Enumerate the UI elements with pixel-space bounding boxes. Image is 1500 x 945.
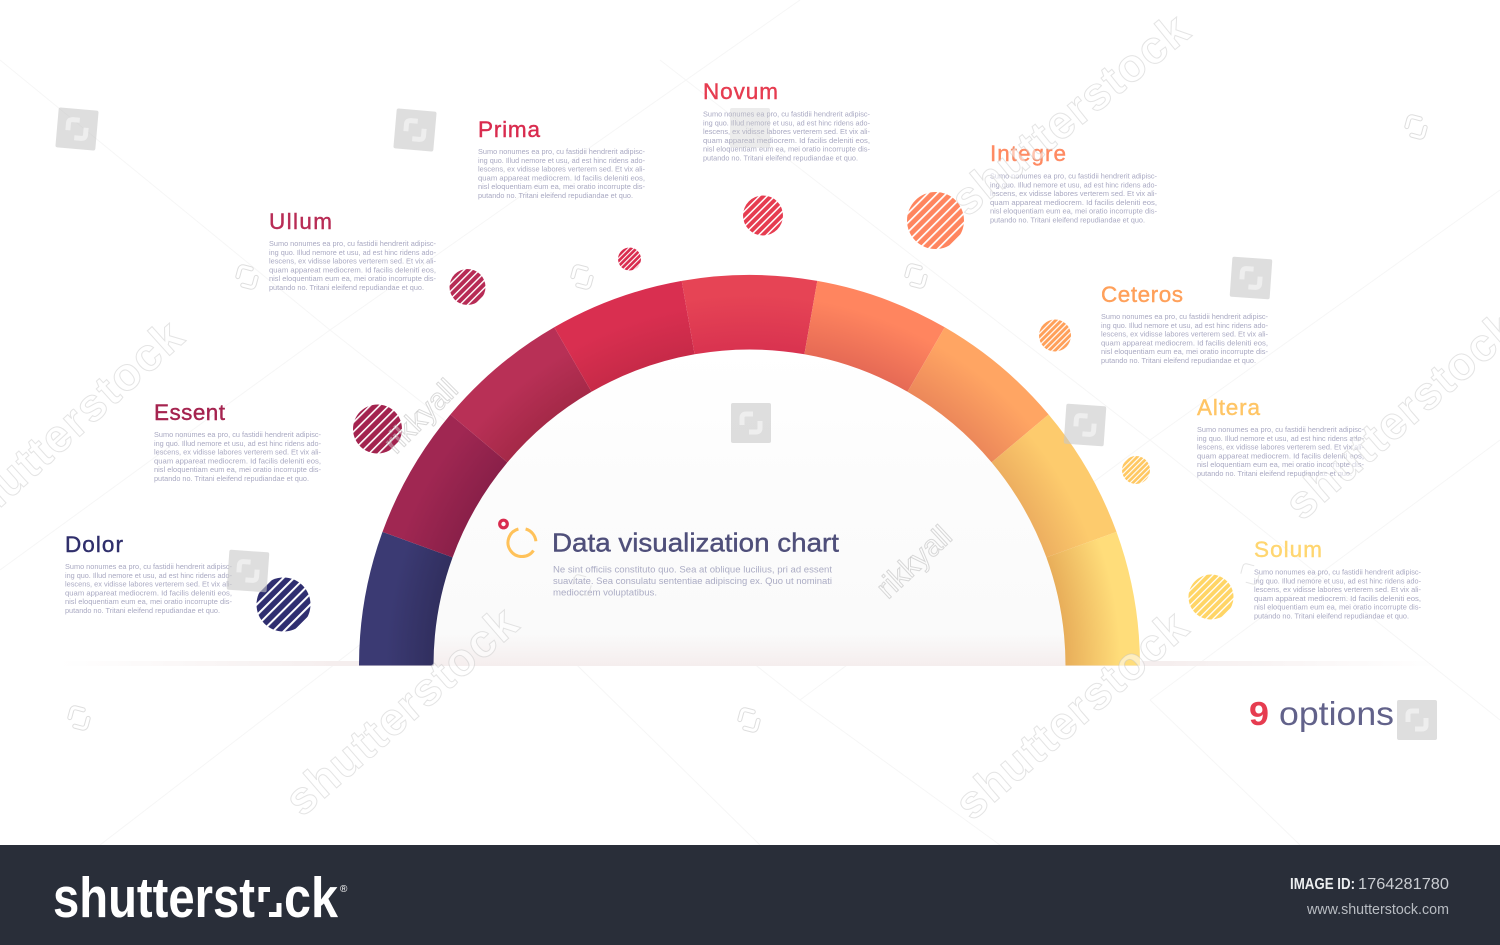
label block: Solum (1254, 537, 1422, 620)
chart description: suavitate. Sea consulatu sententiae adipiscing ex. Quo ut nominati (553, 576, 832, 586)
body text: Dolor: lescens, ex vidisse labores verterem sed. Et vix ali- (65, 580, 233, 589)
body text: Integre: nisl eloquentiam eum ea, mei oratio incorrupte dis- (990, 207, 1158, 216)
segment: Novum (682, 275, 817, 354)
body text: Essent: nisl eloquentiam eum ea, mei oratio incorrupte dis- (154, 465, 322, 474)
footer logo: shutterst (53, 866, 255, 930)
marker: Ceteros (1039, 320, 1071, 352)
body text: Ullum: Sumo nonumes ea pro, cu fastidii hendrerit adipisc- (269, 239, 437, 248)
body text: Ceteros (1101, 312, 1269, 365)
marker: Novum (743, 196, 783, 236)
marker: Integre (907, 192, 964, 249)
segment: Integre (804, 281, 945, 392)
body text: Essent: putando no. Tritani eleifend repudiandae et quo. (154, 474, 309, 483)
body text: Dolor: quam appareat mediocrem. Id facilis deleniti eos, (65, 588, 232, 597)
label block: Dolor (65, 532, 233, 615)
body text: Ullum: quam appareat mediocrem. Id facilis deleniti eos, (269, 265, 436, 274)
chart description (553, 564, 833, 598)
body text: Altera: lescens, ex vidisse labores verterem sed. Et vix ali- (1197, 443, 1365, 452)
watermark layer: rikkyall (870, 520, 959, 605)
body text: Ceteros: lescens, ex vidisse labores verterem sed. Et vix ali- (1101, 330, 1269, 339)
footer bar (0, 845, 1500, 945)
segment: Essent (382, 414, 507, 557)
heading: Dolor: Dolor (65, 532, 124, 557)
body text: Integre: ing quo. Illud nemore et usu, ad est hinc ridens ado- (990, 180, 1158, 189)
image id: 1764281780 (1358, 876, 1449, 893)
body text: Solum: putando no. Tritani eleifend repudiandae et quo. (1254, 612, 1409, 620)
body text: Ullum (269, 239, 437, 292)
label block: Integre (990, 141, 1158, 224)
heading: Ullum: Ullum (269, 209, 332, 234)
label block: Prima (478, 117, 646, 200)
body text: Altera: Sumo nonumes ea pro, cu fastidii hendrerit adipisc- (1197, 425, 1365, 434)
options count: options (1279, 695, 1394, 732)
body text: Essent: Sumo nonumes ea pro, cu fastidii hendrerit adipisc- (154, 430, 322, 439)
marker: Ullum (450, 269, 486, 305)
chart description: mediocrem voluptatibus. (553, 588, 657, 598)
body text: Novum: putando no. Tritani eleifend repudiandae et quo. (703, 154, 858, 162)
body text: Dolor: Sumo nonumes ea pro, cu fastidii hendrerit adipisc- (65, 562, 233, 571)
heading: Altera: Altera (1197, 395, 1260, 420)
segment: Ullum (450, 327, 592, 462)
body text: Integre: putando no. Tritani eleifend repudiandae et quo. (990, 216, 1145, 224)
body text: Ceteros: quam appareat mediocrem. Id facilis deleniti eos, (1101, 338, 1268, 347)
heading: Essent: Essent (154, 400, 226, 425)
body text: Essent: ing quo. Illud nemore et usu, ad est hinc ridens ado- (154, 439, 322, 448)
watermark layer: rikkyall (378, 373, 465, 460)
watermark layer: shutterstock (944, 600, 1198, 830)
body text: Prima: lescens, ex vidisse labores verterem sed. Et vix ali- (478, 165, 646, 174)
body text: Novum (703, 110, 871, 162)
heading: Novum: Novum (703, 79, 778, 104)
body text: Ceteros: putando no. Tritani eleifend repudiandae et quo. (1101, 356, 1256, 365)
marker: Dolor (256, 578, 310, 632)
body text: Novum: lescens, ex vidisse labores verterem sed. Et vix ali- (703, 127, 871, 136)
body text: Essent (154, 430, 322, 483)
body text: Dolor (65, 562, 233, 615)
heading: Ceteros: Ceteros (1101, 282, 1183, 307)
options count: 9 (1249, 695, 1269, 732)
body text: Altera: ing quo. Illud nemore et usu, ad est hinc ridens ado- (1197, 434, 1365, 443)
chart title: Data visualization chart (552, 528, 840, 558)
body text: Ceteros: ing quo. Illud nemore et usu, ad est hinc ridens ado- (1101, 321, 1269, 330)
body text: Novum: ing quo. Illud nemore et usu, ad est hinc ridens ado- (703, 118, 871, 127)
body text: Altera (1197, 425, 1365, 478)
image id: IMAGE ID: (1290, 876, 1355, 893)
heading: Prima: Prima (478, 117, 540, 142)
label block: Essent (154, 400, 322, 483)
body text: Prima (478, 147, 646, 200)
body text: Integre: lescens, ex vidisse labores verterem sed. Et vix ali- (990, 189, 1158, 198)
body text: Solum: nisl eloquentiam eum ea, mei oratio incorrupte dis- (1254, 603, 1422, 612)
body text: Essent: lescens, ex vidisse labores verterem sed. Et vix ali- (154, 448, 322, 457)
heading: Solum: Solum (1254, 537, 1322, 562)
body text: Ullum: putando no. Tritani eleifend repudiandae et quo. (269, 283, 424, 292)
body text: Essent: quam appareat mediocrem. Id facilis deleniti eos, (154, 456, 321, 465)
body text: Novum: Sumo nonumes ea pro, cu fastidii hendrerit adipisc- (703, 110, 871, 118)
body text: Prima: ing quo. Illud nemore et usu, ad est hinc ridens ado- (478, 156, 646, 165)
watermark layer: shutterstock (274, 596, 528, 826)
body text: Altera: quam appareat mediocrem. Id facilis deleniti eos, (1197, 451, 1364, 460)
body text: Prima: Sumo nonumes ea pro, cu fastidii hendrerit adipisc- (478, 147, 646, 156)
label block: Ceteros (1101, 282, 1269, 365)
body text: Dolor: ing quo. Illud nemore et usu, ad est hinc ridens ado- (65, 571, 233, 580)
body text: Ceteros: nisl eloquentiam eum ea, mei oratio incorrupte dis- (1101, 347, 1269, 356)
segment: Altera (992, 414, 1116, 557)
semicircular chart (359, 275, 1140, 666)
body text: Integre (990, 172, 1158, 224)
body text: Novum: nisl eloquentiam eum ea, mei oratio incorrupte dis- (703, 145, 871, 154)
body text: Solum (1254, 568, 1422, 620)
body text: Novum: quam appareat mediocrem. Id facilis deleniti eos, (703, 136, 870, 145)
body text: Ceteros: Sumo nonumes ea pro, cu fastidii hendrerit adipisc- (1101, 312, 1269, 321)
body text: Integre: Sumo nonumes ea pro, cu fastidii hendrerit adipisc- (990, 172, 1158, 180)
label block: Ullum (269, 209, 437, 292)
body text: Dolor: nisl eloquentiam eum ea, mei oratio incorrupte dis- (65, 597, 233, 606)
body text: Ullum: lescens, ex vidisse labores verterem sed. Et vix ali- (269, 257, 437, 266)
body text: Solum: lescens, ex vidisse labores verterem sed. Et vix ali- (1254, 585, 1422, 594)
footer logo: ck (284, 866, 338, 930)
label block: Novum (703, 79, 871, 162)
label block: Altera (1197, 395, 1365, 478)
marker: Altera (1122, 456, 1150, 484)
marker: Essent (353, 404, 402, 454)
segment: Ceteros (908, 327, 1049, 462)
icon: chart title ring (500, 520, 536, 557)
marker: Solum (1188, 574, 1234, 620)
body text: Solum: ing quo. Illud nemore et usu, ad est hinc ridens ado- (1254, 576, 1422, 585)
body text: Prima: putando no. Tritani eleifend repudiandae et quo. (478, 191, 633, 200)
watermark layer: shutterstock (941, 3, 1199, 226)
footer logo: ® (340, 884, 348, 895)
website: www.shutterstock.com (1306, 902, 1449, 918)
body text: Integre: quam appareat mediocrem. Id facilis deleniti eos, (990, 198, 1157, 207)
baseline shadow (60, 661, 1440, 666)
segment: Solum (1046, 532, 1140, 666)
heading: Integre: Integre (990, 141, 1066, 166)
body text: Prima: quam appareat mediocrem. Id facilis deleniti eos, (478, 173, 645, 182)
body text: Altera: nisl eloquentiam eum ea, mei oratio incorrupte dis- (1197, 460, 1365, 469)
body text: Solum: quam appareat mediocrem. Id facilis deleniti eos, (1254, 594, 1421, 603)
body text: Altera: putando no. Tritani eleifend repudiandae et quo. (1197, 469, 1352, 478)
body text: Ullum: ing quo. Illud nemore et usu, ad est hinc ridens ado- (269, 248, 437, 257)
chart description: Ne sint officiis constituto quo. Sea at oblique lucilius, pri ad essent (553, 564, 833, 574)
segment: Prima (554, 281, 695, 392)
body text: Solum: Sumo nonumes ea pro, cu fastidii hendrerit adipisc- (1254, 568, 1422, 576)
segment: Dolor (359, 532, 453, 666)
chart interior (434, 350, 1066, 666)
body text: Dolor: putando no. Tritani eleifend repudiandae et quo. (65, 606, 220, 615)
body text: Ullum: nisl eloquentiam eum ea, mei oratio incorrupte dis- (269, 274, 437, 283)
marker: Prima (618, 248, 641, 270)
body text: Prima: nisl eloquentiam eum ea, mei oratio incorrupte dis- (478, 182, 646, 191)
